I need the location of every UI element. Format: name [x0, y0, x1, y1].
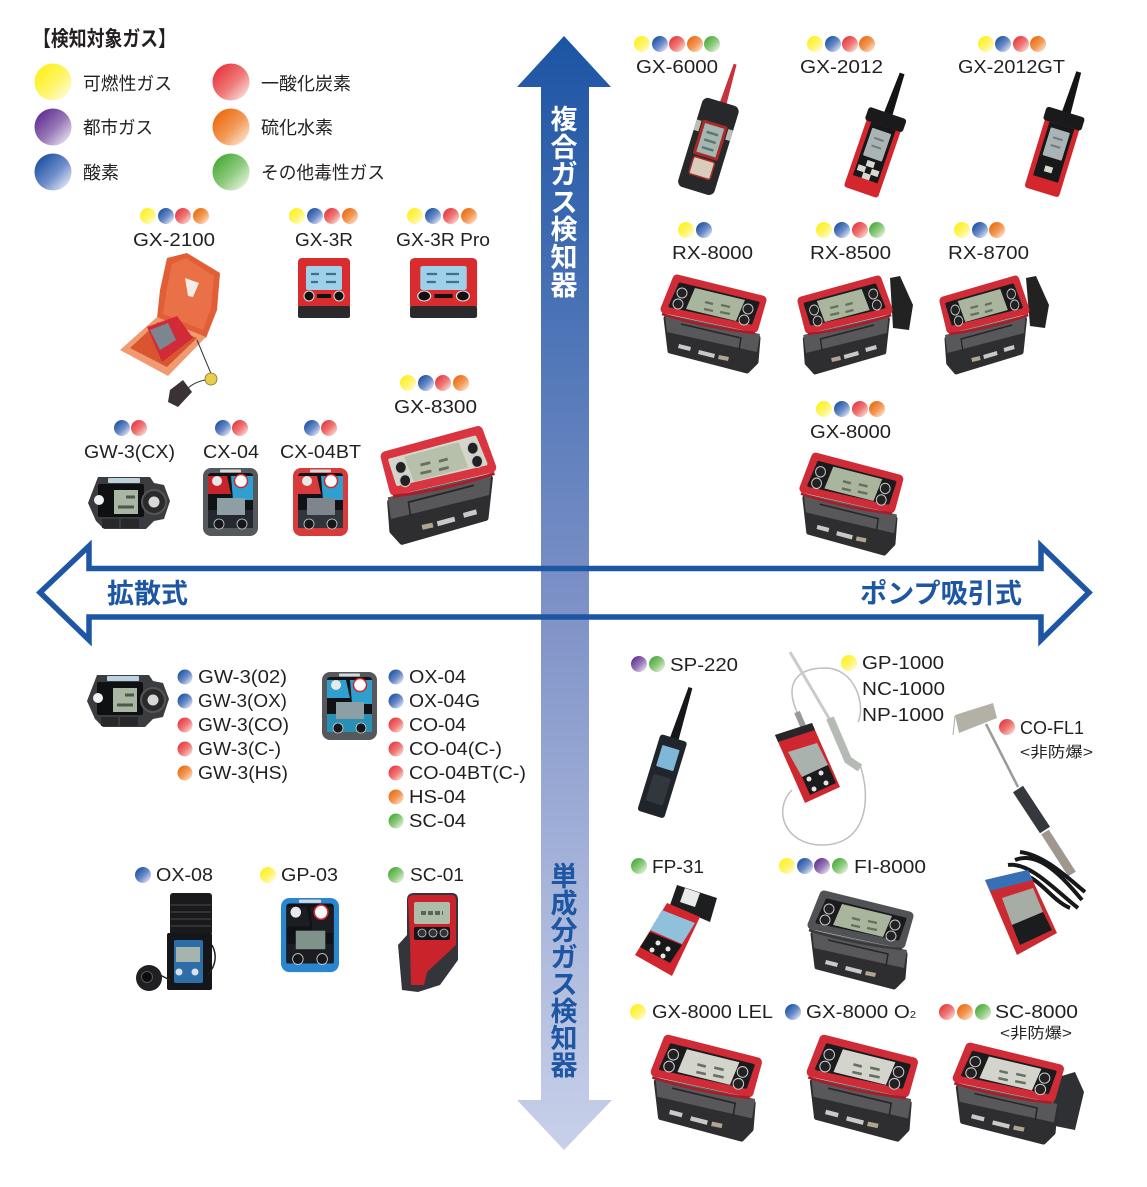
model: GX-3R Pro: GX-3R Pro — [396, 229, 490, 250]
icon: CX-04BT — [293, 468, 348, 536]
model: 04 series: OX-04 — [409, 666, 466, 687]
axis label: multi-gas detectors: 複合ガス検知器 — [550, 105, 578, 301]
model: GP-03: GP-03 — [281, 864, 338, 885]
axis label: diffusion type: 拡散式 — [107, 579, 188, 609]
icon: GP-1000 with probe and tube — [775, 652, 865, 845]
model: GX-3R — [289, 208, 358, 318]
icon: GX-2012 — [842, 67, 921, 199]
model: GX-2012GT — [958, 36, 1097, 198]
model: SC-8000: SC-8000 — [995, 1001, 1078, 1022]
model: GX-2012GT: GX-2012GT — [958, 56, 1065, 77]
icon: RX-8700 — [943, 276, 1049, 372]
icon: GP-03 — [281, 898, 339, 972]
model: 04 series: CO-04 — [409, 714, 466, 735]
model: GX-6000 — [634, 36, 752, 196]
model: 04 series: HS-04 — [409, 786, 466, 807]
model: CX-04 — [203, 420, 259, 536]
icon: GX-2100 in open case — [120, 253, 220, 407]
legend item: oxygen — [34, 154, 119, 190]
model: GX-2100 — [120, 208, 220, 407]
model: CO-FL1: CO-FL1 — [1020, 717, 1084, 738]
model: GP-1000 / NC-1000 / NP-1000: NP-1000 — [862, 704, 944, 725]
model: GW-3 series: GW-3(OX) — [198, 690, 287, 711]
icon: RX-8500 — [802, 276, 913, 372]
model: OX-08 — [135, 864, 215, 991]
model: FI-8000: FI-8000 — [854, 856, 926, 877]
model: GX-2012: GX-2012 — [800, 56, 883, 77]
legend item: oxygen: 酸素 — [83, 163, 119, 183]
icon: FI-8000 — [809, 895, 909, 987]
model: CO-FL1 — [953, 703, 1093, 955]
legend item: city gas — [34, 108, 153, 146]
model: SC-8000 — [939, 1001, 1084, 1142]
icon: CO-FL1 with sampling rod — [953, 703, 1085, 955]
model: CX-04: CX-04 — [203, 441, 259, 462]
icon: GX-6000 — [677, 58, 752, 196]
model: GX-3R: GX-3R — [295, 229, 353, 250]
model: RX-8500: RX-8500 — [810, 242, 891, 263]
model: 04 series: CO-04(C-) — [409, 738, 502, 759]
icon: GX-3R Pro — [410, 258, 477, 318]
model: SC-01: SC-01 — [410, 864, 464, 885]
legend item: combustible gas — [34, 64, 172, 100]
model: GP-03 — [260, 864, 339, 972]
model: GW-3 series: GW-3(HS) — [198, 762, 288, 783]
model: OX-08: OX-08 — [156, 864, 213, 885]
icon: GX-8300 — [386, 431, 495, 542]
legend item: carbon monoxide — [212, 64, 351, 100]
legend item: other toxic gas: その他毒性ガス — [261, 163, 385, 183]
model: GX-2100: GX-2100 — [133, 229, 215, 250]
model: GX-8000 LEL: GX-8000 LEL — [652, 1001, 773, 1022]
model: SC-01 — [388, 864, 464, 992]
model: CO-FL1: <非防爆> — [1020, 744, 1093, 761]
model: GX-3R Pro — [396, 208, 490, 318]
model: SP-220 — [631, 654, 738, 819]
legend item: combustible gas: 可燃性ガス — [83, 74, 172, 94]
icon: OX-04 — [322, 672, 377, 740]
icon: GW-3 — [88, 477, 170, 529]
horizontal axis arrow — [40, 546, 1089, 640]
icon: GX-3R — [298, 258, 350, 318]
model: FP-31 — [631, 856, 717, 976]
model: GW-3(CX): GW-3(CX) — [84, 441, 175, 462]
icon: RX-8000 — [662, 279, 762, 371]
legend item: other toxic gas — [212, 154, 385, 190]
model: GX-8300 — [386, 375, 495, 542]
icon: GW-3 — [87, 675, 169, 727]
icon: OX-08 — [136, 893, 215, 991]
model: CX-04BT: CX-04BT — [280, 441, 361, 462]
axis label: pump suction type: ポンプ吸引式 — [860, 579, 1022, 609]
model: RX-8000: RX-8000 — [672, 242, 753, 263]
model: GX-6000: GX-6000 — [636, 56, 718, 77]
model: GP-1000 / NC-1000 / NP-1000 — [775, 652, 945, 845]
model: GX-2012 — [800, 36, 921, 199]
model: GP-1000 / NC-1000 / NP-1000: NC-1000 — [862, 678, 945, 699]
model: GX-8000 LEL — [630, 1001, 773, 1139]
model: RX-8000 — [662, 222, 762, 371]
legend item: hydrogen sulfide — [212, 108, 333, 146]
model: GW-3 series: GW-3(02) — [198, 666, 287, 687]
model: RX-8700 — [943, 222, 1049, 372]
model: 04 series: CO-04BT(C-) — [409, 762, 526, 783]
icon: SC-01 — [398, 893, 458, 992]
model: GX-8000 O2: GX-8000 O 2 — [806, 1001, 916, 1022]
legend item: city gas: 都市ガス — [83, 118, 153, 138]
model: CX-04BT — [280, 420, 361, 536]
model: 04 series: SC-04 — [409, 810, 466, 831]
icon: GX-2012GT — [1022, 66, 1097, 198]
model: GW-3 series — [87, 666, 289, 783]
model: SP-220: SP-220 — [670, 654, 738, 675]
icon: GX-8000 O2 — [808, 1040, 913, 1139]
model: RX-8700: RX-8700 — [948, 242, 1029, 263]
model: GX-8300: GX-8300 — [394, 396, 477, 417]
model: GX-8000: GX-8000 — [810, 421, 891, 442]
icon: SP-220 — [637, 683, 703, 819]
model: 04 series — [322, 666, 526, 831]
icon: FP-31 — [635, 885, 717, 976]
axis label: single-gas detectors: 単成分ガス検知器 — [550, 862, 578, 1081]
model: SC-8000: <非防爆> — [1000, 1025, 1072, 1042]
model: GW-3 series: GW-3(C-) — [198, 738, 281, 759]
model: GP-1000 / NC-1000 / NP-1000: GP-1000 — [862, 652, 944, 673]
model: RX-8500 — [802, 222, 913, 372]
model: FI-8000 — [779, 856, 926, 987]
icon: CX-04 — [203, 468, 258, 536]
vertical axis arrow — [517, 36, 612, 1150]
model: GX-8000 — [801, 401, 899, 553]
legend title: 【検知対象ガス】 — [33, 28, 176, 51]
legend item: hydrogen sulfide: 硫化水素 — [261, 118, 333, 138]
icon: SC-8000 — [954, 1047, 1084, 1142]
legend item: carbon monoxide: 一酸化炭素 — [261, 74, 351, 94]
icon: GX-8000 LEL — [652, 1040, 757, 1139]
model: GW-3(CX) — [84, 420, 175, 529]
legend — [33, 28, 385, 190]
icon: GX-8000 — [801, 457, 899, 553]
model: GW-3 series: GW-3(CO) — [198, 714, 289, 735]
model: 04 series: OX-04G — [409, 690, 480, 711]
model: GX-8000 O2 — [785, 1001, 916, 1139]
model: FP-31: FP-31 — [652, 856, 704, 877]
